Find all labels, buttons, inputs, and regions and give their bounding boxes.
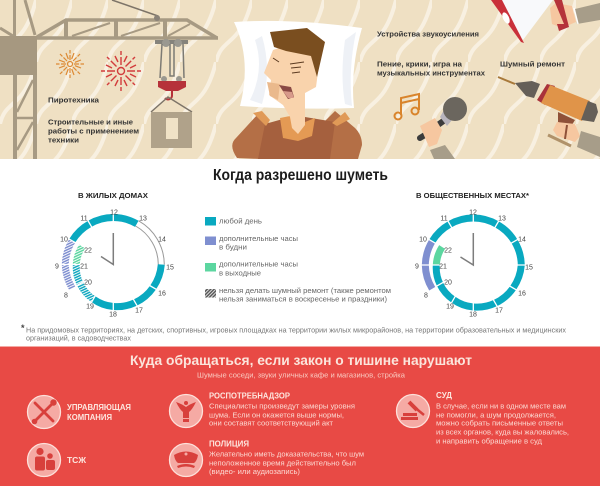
- item: court: [396, 391, 569, 446]
- clock: public places: [415, 191, 533, 318]
- hour labels: 12: [469, 210, 477, 216]
- hour labels: 22: [444, 248, 452, 254]
- icon: hand with drill: [498, 77, 600, 157]
- icon: hand with microphone: [420, 97, 467, 159]
- legend item: weekday hours: в будни: [219, 244, 247, 252]
- icon: people: [28, 444, 60, 476]
- hour labels: 16: [158, 290, 166, 298]
- text: singing and instruments: Пение, крики, игра на: [377, 60, 463, 68]
- description: можно собрать письменные ответы: [436, 420, 563, 428]
- item: police: [170, 440, 364, 476]
- legend item: weekend hours: [205, 262, 298, 278]
- heading: СУД: [436, 391, 452, 400]
- description: и направить обращение в суд: [436, 438, 542, 446]
- heading: В ОБЩЕСТВЕННЫХ МЕСТАХ*: [416, 191, 529, 200]
- legend item: weekday hours: [205, 236, 298, 252]
- description: Специалисты произведут замеры уровня: [209, 404, 355, 410]
- hour labels: 9: [415, 264, 419, 270]
- hour labels: 9: [55, 264, 59, 270]
- legend item: any day: [205, 217, 262, 226]
- legend item: weekday hours: дополнительные часы: [219, 236, 298, 243]
- description: шума. Если он окажется выше нормы,: [209, 412, 344, 420]
- panel heading: Куда обращаться, если закон о тишине нарушают: [130, 352, 472, 368]
- icon: music note: [394, 94, 419, 120]
- legend item: no noisy repairs: нельзя делать шумный ремонт (также ремонтом: [219, 287, 391, 295]
- hour labels: 18: [469, 312, 477, 318]
- footnote text: организаций, в садоводчествах: [26, 334, 131, 342]
- hour labels: 8: [64, 292, 68, 300]
- hour labels: 17: [135, 308, 143, 314]
- clock hands: [460, 233, 473, 265]
- clock: residential buildings: [55, 191, 174, 318]
- text: construction works: Строительные и иные: [48, 118, 133, 126]
- heading: В ЖИЛЫХ ДОМАХ: [78, 191, 148, 200]
- hour labels: 19: [446, 304, 454, 310]
- description: из всех органов, куда вы жаловались,: [436, 430, 569, 436]
- hour labels: 16: [518, 290, 526, 298]
- clock ring: [60, 212, 164, 312]
- text: singing and instruments: музыкальных инструментах: [377, 68, 486, 78]
- text: sound amplifiers: Устройства звукоусиления: [377, 30, 479, 38]
- icon: construction crane: [0, 0, 218, 159]
- hour labels: 11: [440, 216, 448, 222]
- item: management company: [28, 396, 131, 428]
- hour labels: 17: [495, 308, 503, 314]
- panel: noise sources illustration: [0, 0, 600, 159]
- item: Rospotrebnadzor: [170, 392, 355, 428]
- icon: red firework: [101, 51, 141, 91]
- hour labels: 14: [518, 236, 526, 244]
- panel subheading: Шумные соседи, звуки уличных кафе и магазинов, стройка: [197, 370, 406, 380]
- label: УПРАВЛЯЮЩАЯ: [67, 403, 131, 412]
- heading: РОСПОТРЕБНАДЗОР: [209, 392, 291, 400]
- hour labels: 12: [110, 210, 118, 216]
- hour labels: [55, 210, 174, 318]
- label: ТСЖ: [67, 456, 87, 465]
- hour labels: 10: [60, 236, 68, 244]
- description: (видео- или аудиозапись): [209, 469, 300, 476]
- legend item: no noisy repairs: нельзя заниматься в воскресенье и праздники): [219, 296, 387, 304]
- legend item: any day: любой день: [219, 218, 262, 226]
- hour labels: 15: [166, 264, 174, 272]
- hour labels: 11: [80, 216, 88, 222]
- clock hands: [101, 233, 113, 264]
- icon: person covering ears with pillow: [232, 21, 362, 159]
- hour labels: 21: [439, 264, 447, 270]
- description: Желательно иметь доказательства, что шум: [209, 452, 364, 458]
- icon: megaphone: [491, 0, 600, 43]
- text: construction works: техники: [48, 136, 79, 144]
- icon: orange firework: [56, 50, 84, 78]
- hour labels: 10: [419, 236, 427, 244]
- panel: where to complain: [0, 346, 600, 486]
- text: pyrotechnics: Пиротехника: [48, 96, 100, 104]
- hour labels: 20: [444, 280, 452, 286]
- hour labels: [415, 210, 533, 318]
- hour labels: 22: [84, 248, 92, 254]
- legend item: weekend hours: в выходные: [219, 270, 261, 278]
- clock ring: [420, 213, 526, 312]
- hour labels: 18: [109, 312, 117, 318]
- text: noisy repairs: Шумный ремонт: [500, 60, 565, 68]
- title: Когда разрешено шуметь: [213, 167, 388, 184]
- hour labels: 20: [84, 280, 92, 286]
- hour labels: 21: [80, 264, 88, 270]
- hour labels: 13: [139, 216, 147, 222]
- legend item: no noisy repairs: [205, 287, 391, 304]
- icon: emblem: [170, 394, 202, 428]
- hour labels: 19: [86, 304, 94, 310]
- description: не помогли, а шум продолжается,: [436, 412, 556, 420]
- description: они составят соответствующий акт: [209, 420, 334, 428]
- hour labels: 14: [158, 236, 166, 244]
- hour labels: 13: [498, 216, 506, 222]
- text: construction works: работы с применением: [48, 126, 139, 136]
- hour labels: 15: [525, 264, 533, 272]
- label: КОМПАНИЯ: [67, 413, 112, 422]
- item: HOA: [28, 444, 87, 476]
- heading: ПОЛИЦИЯ: [209, 440, 249, 448]
- legend: [205, 217, 391, 304]
- icon: wrench and screwdriver: [28, 396, 60, 428]
- description: неположенное время действительно был: [209, 460, 356, 468]
- icon: police cap: [170, 444, 202, 476]
- footnote text: На придомовых территориях, на детских, спортивных, игровых площадках на территории жилых микрорайонов, на территории образовательных и медицинских: [26, 326, 567, 334]
- legend item: weekend hours: дополнительные часы: [219, 262, 298, 268]
- icon: gavel: [396, 394, 430, 428]
- hour labels: 8: [424, 292, 428, 300]
- footnote: *: [21, 323, 25, 333]
- description: В случае, если ни в одном месте вам: [436, 404, 566, 410]
